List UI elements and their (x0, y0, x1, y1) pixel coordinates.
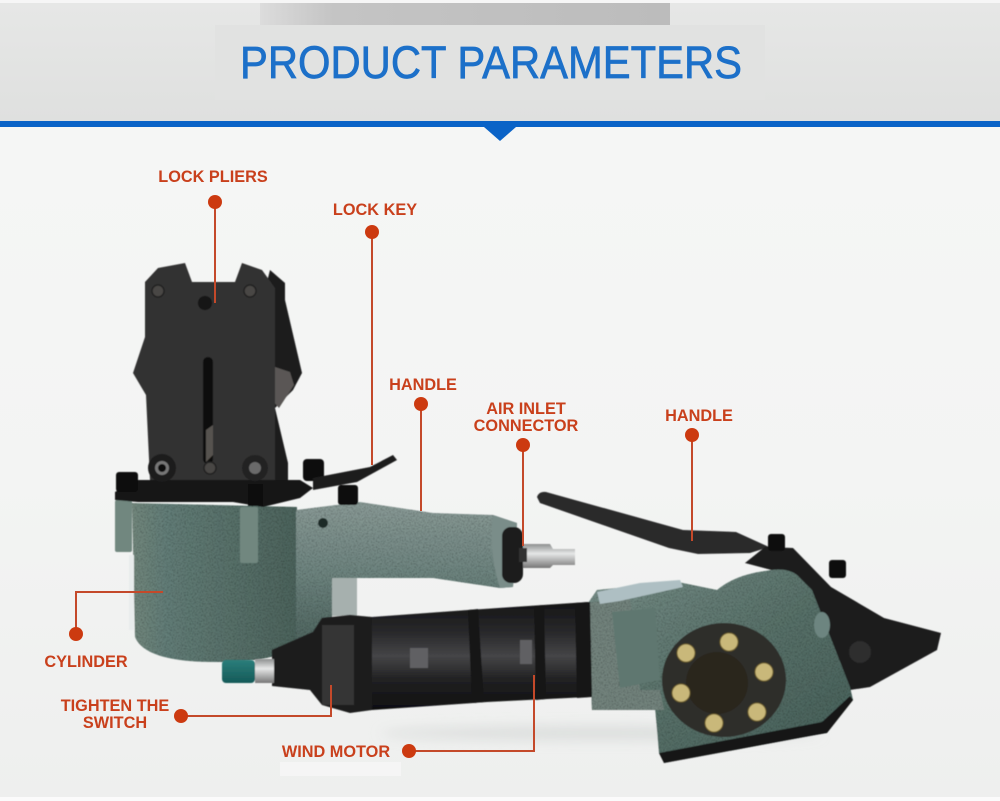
air connector (502, 527, 575, 583)
callout: lock pliers: LOCK PLIERS (158, 168, 268, 186)
nose collar (272, 615, 372, 713)
brass screws (672, 633, 773, 732)
head bolts (768, 534, 871, 663)
callout: air inlet connector: CONNECTOR (474, 417, 579, 435)
silver nose tip (255, 659, 274, 683)
black top disc (115, 480, 313, 507)
motor rings (468, 602, 592, 703)
motor body (372, 602, 588, 710)
plate slot (203, 357, 213, 464)
disc hub (686, 652, 748, 714)
bottom edge strip (0, 797, 1000, 801)
handle leg (330, 578, 357, 616)
callout: air inlet connector: AIR INLET (486, 400, 566, 418)
callout: handle (upper tool): HANDLE (389, 376, 457, 394)
motor highlights (410, 640, 532, 668)
floor patch under wind motor label (280, 762, 401, 776)
blue divider with arrow (0, 121, 1000, 141)
black disc (662, 623, 786, 737)
blue-gray plate (597, 580, 683, 604)
callout: tighten the switch: TIGHTEN THE (61, 697, 169, 715)
title: PRODUCT PARAMETERS (240, 37, 742, 88)
cylinder white label edge (129, 555, 134, 630)
shadow beneath tool (380, 726, 820, 740)
plate screws (152, 285, 256, 474)
side port (814, 612, 830, 638)
header band (0, 0, 1000, 121)
callout: handle (upper tool) (389, 376, 457, 511)
callout: handle (lower tool): HANDLE (665, 407, 733, 425)
handle end face (492, 515, 517, 588)
base edge (659, 696, 853, 763)
lock key lever (313, 455, 397, 490)
callout: handle (lower tool) (665, 407, 733, 541)
callout: cylinder (44, 592, 163, 671)
top bolts (116, 454, 358, 506)
cylinder body (132, 503, 297, 662)
callout: lock key (333, 201, 417, 465)
green housing (588, 570, 853, 763)
mount hole (318, 518, 328, 528)
gray bracket (588, 598, 664, 710)
lock pliers plate (133, 263, 275, 480)
product: lower strapping tool (222, 492, 941, 763)
callout: air inlet connector (474, 400, 579, 546)
black head (745, 547, 941, 690)
callout: tighten the switch (61, 685, 331, 732)
column and handle (296, 502, 517, 652)
teal nozzle (222, 660, 255, 683)
cylinder tabs (115, 500, 258, 563)
callout: lock key: LOCK KEY (333, 201, 417, 219)
callout: cylinder: CYLINDER (44, 653, 128, 671)
linkage behind plate (265, 270, 302, 480)
lever handle (537, 492, 769, 554)
callout: tighten the switch: SWITCH (83, 714, 147, 732)
callout: wind motor: WIND MOTOR (282, 743, 390, 761)
callout: wind motor (282, 675, 534, 761)
callout: lock pliers (158, 168, 268, 303)
product: upper strapping tool (115, 263, 575, 662)
